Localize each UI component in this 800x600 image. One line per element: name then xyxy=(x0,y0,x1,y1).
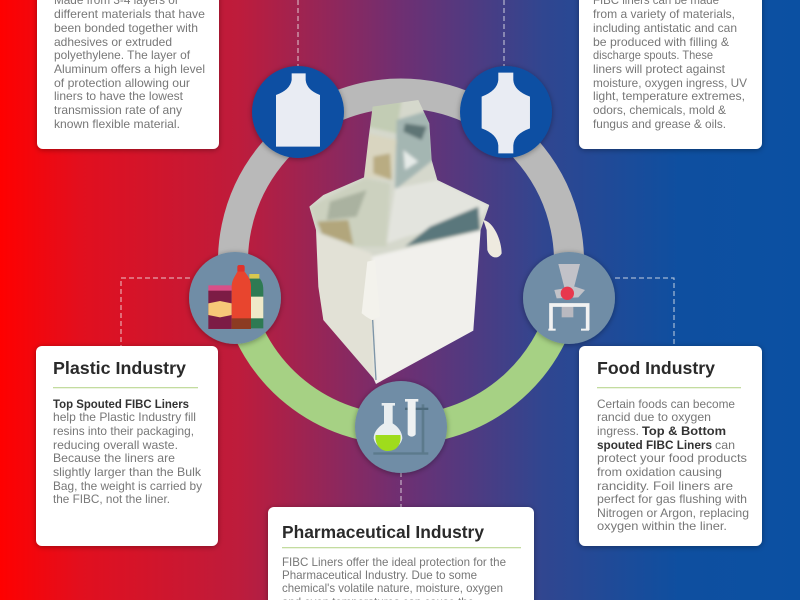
pharmaceutical industry text: FIBC Liners offer the ideal protection for the xyxy=(282,555,506,569)
FIBC liner materials text: liners will protect against xyxy=(593,62,726,76)
plastic industry text: resins into their packaging, xyxy=(53,424,194,438)
icon: plastic bottles xyxy=(189,252,281,344)
foil liner bulk bag xyxy=(303,97,502,390)
icon: food grinder xyxy=(523,252,615,344)
plastic industry text: slightly larger than the Bulk xyxy=(53,465,202,479)
icon: laboratory flask xyxy=(355,381,447,473)
plastic industry text: Bag, the weight is carried by xyxy=(53,479,202,493)
FIBC liner materials text: be produced with filling & xyxy=(593,35,729,49)
food industry text xyxy=(597,397,749,533)
panel: plastic industry xyxy=(36,346,218,546)
food industry text: protect your food products xyxy=(597,451,747,465)
food industry text: Top & Bottom xyxy=(642,424,726,438)
FIBC liner materials text: including antistatic and can xyxy=(593,21,737,35)
FIBC liner materials text: odors, chemicals, mold & xyxy=(593,103,726,117)
food industry text: from oxidation causing xyxy=(597,465,722,479)
foil liners text xyxy=(54,0,205,131)
plastic industry text: Because the liners are xyxy=(53,451,175,465)
food industry text: can xyxy=(715,438,735,452)
foil liners text: been bonded together with xyxy=(54,21,198,35)
heading: plastic industry: Plastic Industry xyxy=(53,358,186,378)
heading: food industry: Food Industry xyxy=(597,358,715,378)
plastic industry text: the FIBC, not the liner. xyxy=(53,492,170,506)
plastic industry text: reducing overall waste. xyxy=(53,438,178,452)
pharmaceutical industry text: chemical's volatile nature, moisture, oxygen xyxy=(282,581,503,595)
foil liners text: Aluminum offers a high level xyxy=(54,62,205,76)
foil liners text: liners to have the lowest xyxy=(54,89,184,103)
FIBC liner materials text xyxy=(593,0,747,131)
foil liners text: adhesives or extruded xyxy=(54,35,172,49)
FIBC liner materials text: fungus and grease & oils. xyxy=(593,117,726,131)
food industry text: rancidity. Foil liners are xyxy=(597,479,733,493)
heading: pharmaceutical industry: Pharmaceutical Industry xyxy=(282,522,484,542)
panel: FIBC liner materials xyxy=(579,0,762,149)
foil liners text: transmission rate of any xyxy=(54,103,182,117)
foil liners text: polyethylene. The layer of xyxy=(54,48,191,62)
FIBC liner materials text: discharge spouts. These xyxy=(593,48,713,62)
food industry text: rancid due to oxygen xyxy=(597,410,711,424)
foil liners text: of protection allowing our xyxy=(54,76,190,90)
panel: foil liners xyxy=(37,0,219,149)
icon: top spout liner xyxy=(252,66,344,158)
plastic industry text xyxy=(53,397,202,506)
dashed connector lines xyxy=(121,0,674,507)
FIBC liner materials text: moisture, oxygen ingress, UV xyxy=(593,76,747,90)
foil liners text: different materials that have xyxy=(54,7,205,21)
icon: top and bottom spout liner xyxy=(460,66,552,158)
food industry text: oxygen within the liner. xyxy=(597,519,727,533)
pharmaceutical industry text: Pharmaceutical Industry. Due to some xyxy=(282,568,477,582)
foil liners text: known flexible material. xyxy=(54,117,180,131)
food industry text: ingress. xyxy=(597,424,639,438)
FIBC liner materials text: from a variety of materials, xyxy=(593,7,735,21)
food industry text: Certain foods can become xyxy=(597,397,735,411)
food industry text: Nitrogen or Argon, replacing xyxy=(597,506,749,520)
pharmaceutical industry text xyxy=(282,555,506,600)
panel: food industry xyxy=(579,346,762,546)
plastic industry text: help the Plastic Industry fill xyxy=(53,410,196,424)
food industry text: perfect for gas flushing with xyxy=(597,492,747,506)
FIBC liner materials text: light, temperature extremes, xyxy=(593,89,745,103)
plastic industry text: Top Spouted FIBC Liners xyxy=(53,397,189,411)
panel: pharmaceutical industry xyxy=(268,507,534,600)
food industry text: spouted FIBC Liners xyxy=(597,438,712,452)
process ring xyxy=(233,94,569,430)
